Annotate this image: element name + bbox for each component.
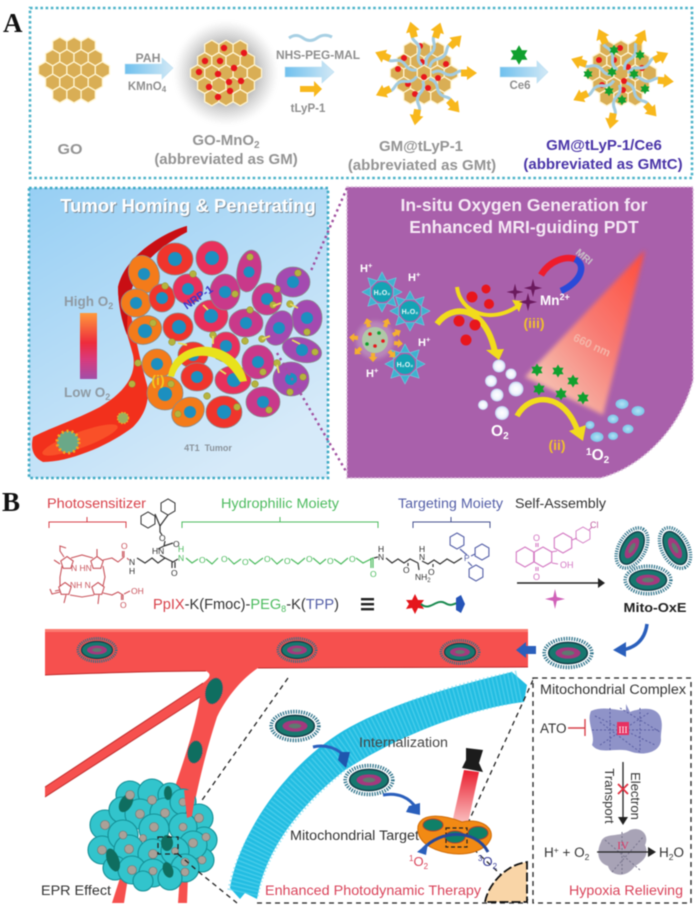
text: compound formula: PpIX-K(Fmoc)-PEG xyxy=(153,597,281,613)
icon: complex IV: IV xyxy=(617,840,629,852)
diagram: PEG8 chain: O xyxy=(264,554,271,564)
label: hydrophilic moiety: Hydrophilic Moiety xyxy=(221,496,339,511)
icon: H2O2 cloud and nanoparticle: H xyxy=(408,272,416,284)
label: step i: (i) xyxy=(151,372,165,388)
heading: Tumor Homing & Penetrating xyxy=(60,195,316,216)
arrow: PEG and tLyP-1 step: tLyP-1 xyxy=(291,103,326,115)
chart: oxygen gradient legend: Low O xyxy=(64,385,105,400)
label: targeting moiety xyxy=(398,496,503,528)
diagram: PpIX porphyrin: N HN xyxy=(71,563,92,573)
heading: In-situ Oxygen Generation for xyxy=(401,195,648,215)
icon: cytoplasmic nanoparticles xyxy=(271,712,393,794)
label: photosensitizer xyxy=(47,496,147,528)
icon: Mn2+ stars xyxy=(507,279,542,311)
label: MRI: MRI xyxy=(573,247,594,268)
label: singlet oxygen: O xyxy=(592,447,604,464)
icon: MRI magnet xyxy=(541,258,581,291)
text: GO-MnO2 label: 2 xyxy=(254,140,260,151)
label: singlet oxygen: 1 xyxy=(409,854,414,863)
icon: H2O2 cloud and nanoparticle: H₂O₂ xyxy=(402,309,418,316)
text: water formation reaction: H xyxy=(659,845,669,860)
diagram: atovaquone molecule: OH xyxy=(560,560,574,570)
icon: atovaquone star xyxy=(545,589,565,609)
diagram: atovaquone molecule: O xyxy=(533,572,540,582)
label: ATO inhibitor: ATO xyxy=(540,721,567,736)
text: water formation reaction: O xyxy=(673,845,684,860)
heading: Mitochondrial Complex xyxy=(540,682,686,697)
diagram: PEG8 chain: H xyxy=(178,544,184,554)
diagram: Fmoc lysine linker: HN xyxy=(152,546,164,556)
arrow: Ce6 step xyxy=(500,45,548,92)
text: water formation reaction: + O xyxy=(559,845,585,860)
section: bottom scene xyxy=(41,624,647,903)
label: panel A: A xyxy=(3,8,23,38)
icon: complex III xyxy=(590,704,662,754)
icon: H2O2 cloud and nanoparticle: H xyxy=(360,263,368,275)
label: Mn2+: 2+ xyxy=(560,292,570,302)
icon: H2O2 cloud and nanoparticle: + xyxy=(426,335,431,344)
arrow: PAH KMnO4 step xyxy=(125,53,173,94)
text: GM@tLyP-1 label: (abbreviated as GMt) xyxy=(348,157,496,174)
diagram: TPP targeting group xyxy=(374,533,489,584)
text: water formation reaction: + xyxy=(554,845,559,855)
text: GO: GO xyxy=(58,141,83,158)
diagram: PpIX porphyrin: O xyxy=(121,541,128,551)
arrow: Ce6 step: Ce6 xyxy=(509,80,531,92)
connector: zoom dashed lines xyxy=(158,678,533,903)
label: targeting moiety: Targeting Moiety xyxy=(398,496,503,511)
arrow: PAH KMnO4 step: 4 xyxy=(162,85,167,94)
icon: amphiphile schematic xyxy=(406,594,465,614)
diagram: Fmoc lysine linker: O xyxy=(171,568,178,578)
chart: oxygen gradient legend: High O xyxy=(64,294,108,309)
label: EPR effect: EPR Effect xyxy=(41,883,111,898)
arrow: singlet oxygen generation xyxy=(517,400,586,441)
diagram: PpIX porphyrin: O xyxy=(120,600,127,610)
arrow: PAH KMnO4 step: PAH xyxy=(136,53,160,65)
diagram: TPP targeting group: NH xyxy=(415,572,427,582)
label: ATO inhibitor xyxy=(540,719,585,736)
arrow: PEG and tLyP-1 step xyxy=(276,35,360,115)
arrow: self-assembly xyxy=(517,578,605,588)
icon: Mito-OxE nanoparticles xyxy=(610,522,697,594)
label: singlet oxygen: 2 xyxy=(424,862,429,871)
arrow: PEG and tLyP-1 step: NHS-PEG-MAL xyxy=(276,50,360,62)
icon: tumor mass xyxy=(88,779,217,891)
label: 4T1 tumor: 4T1 Tumor xyxy=(184,443,232,453)
diagram: Fmoc lysine linker: H xyxy=(129,566,135,576)
arrow: electron transport: Electron xyxy=(628,772,643,820)
icon: mitochondrion xyxy=(418,816,491,854)
icon: GM@tLyP-1 particle xyxy=(372,20,477,126)
label: step ii: (ii) xyxy=(548,437,566,453)
arrow: electron transport: Transport xyxy=(602,768,617,824)
arrow: oxygen conversion arc xyxy=(417,834,488,855)
text: compound formula: -K( xyxy=(286,597,306,613)
diagram: Fmoc lysine linker xyxy=(129,499,180,578)
label: mitochondrial target: Mitochondrial Target xyxy=(290,828,419,843)
icon: singlet oxygen bubbles xyxy=(586,399,644,442)
diagram: PEG8 chain: O xyxy=(284,556,291,566)
diagram: PEG8 chain: N xyxy=(178,553,184,563)
diagram: TPP targeting group: H xyxy=(378,544,384,554)
label: Mn2+: Mn xyxy=(540,293,560,308)
icon: GO-MnO2 sheet xyxy=(174,21,278,125)
panel: in-situ oxygen generation xyxy=(347,187,693,478)
diagram: PEG8 chain: O xyxy=(199,555,206,565)
label: photosensitizer: Photosensitizer xyxy=(47,496,147,511)
connector: dotted zoom lines xyxy=(277,188,347,473)
diagram: PEG8 chain: O xyxy=(370,569,377,579)
icon: H2O2 cloud and nanoparticle: + xyxy=(374,366,379,375)
label: triplet oxygen: O xyxy=(482,854,493,869)
diagram: PEG8 chain: O xyxy=(327,556,334,566)
diagram: atovaquone molecule: O xyxy=(533,533,540,543)
diagram: PpIX porphyrin: NH N xyxy=(70,580,91,590)
icon: nanoparticles bound to receptors xyxy=(129,254,318,417)
section: molecular structure xyxy=(47,496,697,615)
panel: synthesis scheme xyxy=(30,8,692,178)
arrow: penetration arc xyxy=(168,347,247,382)
label: hydrophilic moiety xyxy=(182,496,378,528)
text: GO-MnO2 label: (abbreviated as GM) xyxy=(154,151,298,168)
label: triplet oxygen: 2 xyxy=(493,862,498,871)
icon: laser device xyxy=(452,748,483,823)
diagram: PpIX porphyrin xyxy=(50,541,144,610)
icon: circulating nanoparticles xyxy=(57,412,128,453)
diagram: TPP targeting group: 2 xyxy=(427,578,431,584)
text: water formation reaction: H xyxy=(544,845,554,860)
arrow: delivery curve xyxy=(613,624,647,657)
icon: incoming nanoparticle xyxy=(544,639,592,667)
icon: nanoparticles in vessel xyxy=(78,638,479,764)
chart: oxygen gradient legend xyxy=(64,294,113,402)
arrow: MnO2 decomposition swooshes xyxy=(437,287,523,360)
chart: oxygen gradient legend: 2 xyxy=(105,392,110,402)
diagram: PEG8 chain: O xyxy=(306,554,313,564)
label: enhanced photodynamic therapy: Enhanced Photodynamic Therapy xyxy=(265,882,481,898)
icon: tumor cell cluster xyxy=(121,241,324,433)
label: self-assembly: Self-Assembly xyxy=(515,496,606,511)
label: 660 nm: 660 nm xyxy=(571,332,612,360)
text: water formation reaction: 2 xyxy=(669,852,674,862)
panel: mitochondrial complex xyxy=(533,678,691,903)
icon: O2 bubbles xyxy=(478,360,524,420)
icon: GM@tLyP-1/Ce6 particle xyxy=(569,26,674,130)
text: GM@tLyP-1 label: GM@tLyP-1 xyxy=(379,138,463,155)
arrow: PAH KMnO4 step: KMnO xyxy=(128,81,162,93)
arrow: electron transport xyxy=(602,762,643,825)
diagram: TPP targeting group: N xyxy=(419,552,425,562)
label: step iii: (iii) xyxy=(524,315,544,331)
diagram: TPP targeting group: O xyxy=(428,567,435,577)
text: compound formula: TPP) xyxy=(306,597,339,613)
chart: oxygen gradient legend: 2 xyxy=(108,301,113,311)
label: O2: 2 xyxy=(503,431,509,442)
label: singlet oxygen: 1 xyxy=(586,447,592,458)
text: GM@tLyP-1/Ce6 label: (abbreviated as GMtC) xyxy=(523,156,683,173)
text: GM@tLyP-1/Ce6 label: GM@tLyP-1/Ce6 xyxy=(546,137,662,154)
icon: H2O2 cloud and nanoparticle: + xyxy=(416,270,421,279)
icon: complex IV xyxy=(598,829,648,876)
icon: H2O2 cloud and nanoparticle: + xyxy=(368,261,373,270)
icon: complex III: III xyxy=(618,725,628,735)
text: compound formula: 8 xyxy=(281,604,286,614)
icon: H2O2 cloud and nanoparticle: H₂O₂ xyxy=(374,290,390,297)
icon: blood vessel network xyxy=(45,629,528,903)
label: internalization: Internalization xyxy=(359,735,448,750)
label: hypoxia relieving: Hypoxia Relieving xyxy=(569,882,683,898)
label: singlet oxygen: 2 xyxy=(604,455,610,466)
diagram: TPP targeting group: O xyxy=(403,565,410,575)
diagram: Fmoc lysine linker: N xyxy=(129,557,135,567)
diagram: Fmoc lysine linker: O xyxy=(173,539,180,549)
heading: Enhanced MRI-guiding PDT xyxy=(409,217,639,237)
icon: H2O2 cloud and nanoparticle: H₂O₂ xyxy=(397,362,413,369)
icon: H2O2 cloud and nanoparticle: H xyxy=(366,368,374,380)
icon: 660 nm light cone xyxy=(525,250,645,415)
diagram: atovaquone molecule xyxy=(516,520,598,582)
diagram: TPP targeting group: P xyxy=(464,553,470,563)
icon: H2O2 cloud and nanoparticle: H xyxy=(418,337,426,349)
text: water formation reaction: 2 xyxy=(585,852,590,862)
diagram: TPP targeting group: H xyxy=(419,544,425,554)
label: triplet oxygen: 3 xyxy=(478,854,483,863)
diagram: PEG8 chain: O xyxy=(349,554,356,564)
icon: nucleus corner xyxy=(485,862,527,902)
label: panel B: B xyxy=(2,487,20,517)
icon: H2O2 cloud and nanoparticle xyxy=(349,261,431,384)
diagram: TPP targeting group: N xyxy=(378,552,384,562)
diagram: PEG8 chain: O xyxy=(221,554,228,564)
diagram: PEG8 chain: O xyxy=(242,557,249,567)
arrow: mitochondrial targeting xyxy=(383,794,420,815)
text: GO-MnO2 label: GO-MnO xyxy=(192,132,260,151)
icon: blood vessel xyxy=(32,226,187,462)
heading: Tumor Homing & Penetrating xyxy=(61,196,317,217)
diagram: atovaquone molecule: Cl xyxy=(590,520,598,530)
icon: equivalent sign xyxy=(361,598,374,610)
text: water formation reaction xyxy=(544,845,684,862)
arrow: entry into vessel xyxy=(516,642,536,658)
arrow: internalization xyxy=(313,746,350,768)
diagram: Fmoc lysine linker: O xyxy=(159,533,166,543)
panel: tumor homing and penetrating xyxy=(29,188,328,478)
icon: mitochondrial membrane band xyxy=(230,672,527,899)
icon: Ce6 stars xyxy=(531,364,589,404)
icon: MnO2 dots xyxy=(454,284,494,346)
icon: GO sheet xyxy=(38,37,110,103)
diagram: PpIX porphyrin: OH xyxy=(131,586,144,596)
label: NRP-1: NRP-1 xyxy=(182,283,216,312)
label: Mito-OxE: Mito-OxE xyxy=(624,600,687,615)
diagram: PEG8 chain xyxy=(178,544,377,579)
label: singlet oxygen: O xyxy=(413,854,424,869)
label: O2: O xyxy=(491,423,503,440)
